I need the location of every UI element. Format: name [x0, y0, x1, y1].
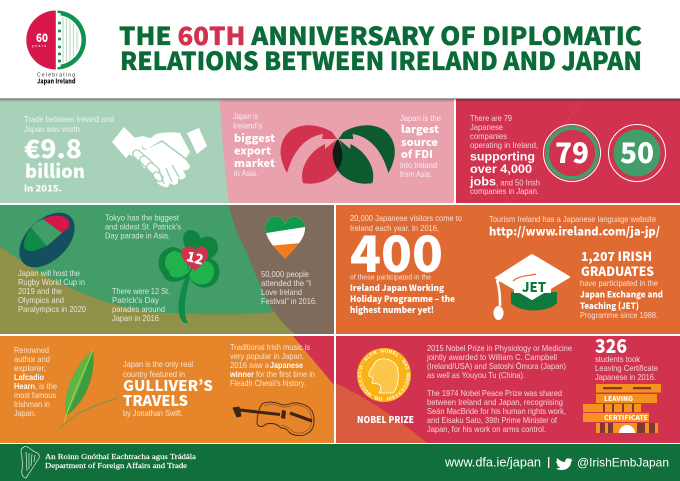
panel: rugby, St. Patrick's Day and festival: 2019 and the	[18, 287, 62, 296]
logo: 60 years Celebrating Japan Ireland	[26, 10, 86, 86]
icon: shamrock with 12: 12	[184, 246, 206, 270]
panel: biggest export market and largest source of FDI: Japan is	[233, 112, 258, 121]
panel: Lafcadio Hearn, Gulliver's Travels and Irish music: Japanese	[270, 361, 303, 370]
logo: 60 years Celebrating Japan Ireland: years	[32, 44, 46, 48]
panel: rugby, St. Patrick's Day and festival: Japan in 2016.	[112, 314, 161, 323]
panel: rugby, St. Patrick's Day and festival: Paralympics in 2020	[18, 305, 86, 314]
panel: Lafcadio Hearn, Gulliver's Travels and Irish music: Hearn	[14, 382, 35, 391]
panel: Japanese companies and jobs: jobs	[469, 176, 496, 188]
panel: trade worth 9.8 billion: €9.8	[24, 130, 82, 166]
panel: biggest export market and largest source of FDI: source	[401, 135, 438, 150]
icon: Irish flag heart	[266, 216, 305, 259]
footer bar: @IrishEmbJapan	[577, 456, 669, 470]
medal portrait	[369, 359, 398, 393]
panel: visitors and JET graduates: highest number yet!	[350, 303, 434, 316]
panel: Japanese companies and jobs: Japanese	[470, 123, 503, 132]
icon: shamrock with 12	[159, 230, 219, 323]
panel: Nobel Prize: NOBEL PRIZE	[357, 413, 414, 426]
panel: Japanese companies and jobs: over 4,000	[470, 164, 532, 176]
panel: rugby, St. Patrick's Day and festival: parades around	[112, 305, 165, 314]
panel: rugby, St. Patrick's Day and festival: Tokyo has the biggest	[105, 214, 180, 222]
icon: red and green arrows	[281, 125, 395, 184]
text: Nobel Prize details: 2015 Nobel Prize in Physiology or Medicine	[427, 344, 572, 353]
panel: biggest export market and largest source of FDI: in Asia.	[234, 169, 258, 178]
panel: Lafcadio Hearn, Gulliver's Travels and Irish music: most famous	[14, 391, 56, 400]
panel: biggest export market and largest source of FDI: biggest	[234, 131, 275, 146]
panel: Leaving Certificate: 326	[595, 332, 627, 359]
panel: biggest export market and largest source of FDI: largest	[401, 122, 439, 137]
title	[119, 17, 642, 78]
panel: Leaving Certificate: Leaving Certificate	[595, 364, 658, 373]
badge: 50	[608, 124, 666, 182]
logo: 60 years Celebrating Japan Ireland: 60	[36, 30, 48, 46]
panel: visitors and JET graduates: http://www.ireland.com/ja-jp/	[489, 224, 661, 240]
icon: quill leaf	[60, 350, 118, 429]
panel: biggest export market and largest source of FDI: market	[234, 156, 275, 171]
panel: trade worth 9.8 billion: Japan was worth	[24, 125, 80, 134]
panel: Leaving Certificate: students took	[595, 355, 641, 364]
panel: visitors and JET graduates: Programme since 1988.	[580, 311, 658, 320]
footer bar: Department of Foreign Affairs and Trade	[45, 461, 188, 470]
panel: Japanese companies and jobs: companies	[470, 132, 507, 141]
panel: rugby, St. Patrick's Day and festival: Patrick's Day	[112, 296, 160, 305]
panel: visitors and JET graduates: Tourism Ireland has a Japanese language website	[489, 215, 656, 224]
panel: Lafcadio Hearn, Gulliver's Travels and Irish music: Irishman in	[14, 400, 50, 409]
footer bar	[0, 444, 680, 481]
icon: stack of books: LEAVING	[604, 394, 633, 403]
title: RELATIONS BETWEEN IRELAND AND JAPAN	[120, 42, 642, 78]
icon: JET graduation cap	[494, 255, 569, 320]
icon: harp	[21, 447, 39, 478]
panel: Lafcadio Hearn, Gulliver's Travels and Irish music: country featured in	[123, 370, 185, 379]
panel: Lafcadio Hearn, Gulliver's Travels and Irish music: author and	[14, 355, 50, 364]
panel: Lafcadio Hearn, Gulliver's Travels and Irish music: explorer,	[14, 364, 46, 373]
panel: Lafcadio Hearn, Gulliver's Travels and Irish music: by Jonathan Swift.	[123, 409, 183, 418]
panel: Lafcadio Hearn, Gulliver's Travels and Irish music: for the first time in	[256, 370, 315, 379]
panel: visitors and JET graduates: have participated in the	[580, 279, 658, 288]
panel: Japanese companies and jobs: companies in Japan.	[470, 187, 539, 196]
panel: rugby, St. Patrick's Day and festival: Japan will host the	[18, 269, 80, 278]
icon: fiddle	[233, 402, 314, 436]
panel: trade worth 9.8 billion	[24, 115, 207, 194]
panel: visitors and JET graduates: Japan Exchange and	[580, 288, 663, 300]
panel: Japanese companies and jobs	[469, 114, 666, 196]
icon: handshake	[112, 127, 207, 187]
text: Nobel Prize details: jointly awarded to William C. Campbell	[426, 353, 557, 362]
panel: rugby, St. Patrick's Day and festival: attended the “I	[261, 279, 311, 288]
panel: Leaving Certificate: Japanese in 2016.	[595, 373, 656, 382]
icon: stack of books	[583, 384, 661, 433]
panel: visitors and JET graduates: 400	[350, 215, 443, 287]
icon: rugby ball	[9, 202, 85, 278]
panel: Lafcadio Hearn, Gulliver's Travels and Irish music: , is the	[35, 382, 57, 391]
panel: trade worth 9.8 billion: in 2015.	[24, 182, 62, 194]
panel: Lafcadio Hearn, Gulliver's Travels and Irish music: GULLIVER’S	[123, 375, 213, 396]
footer bar: www.dfa.ie/japan	[444, 454, 541, 470]
panel: biggest export market and largest source of FDI: Ireland's	[233, 122, 262, 130]
panel: Lafcadio Hearn, Gulliver's Travels and Irish music: Lafcadio	[14, 373, 44, 382]
panel: rugby, St. Patrick's Day and festival: Rugby World Cup in	[18, 278, 85, 287]
panel: visitors and JET graduates: GRADUATES	[581, 261, 654, 280]
panel: biggest export market and largest source of FDI: into Ireland	[400, 161, 437, 170]
badge: 50: 50	[620, 132, 654, 172]
panel: visitors and JET graduates: of these participated in the	[350, 272, 431, 282]
panel: Lafcadio Hearn, Gulliver's Travels and Irish music: 2016 saw a	[230, 361, 269, 370]
text: Nobel Prize details: Seán MacBride for his human rights work,	[427, 407, 566, 416]
panel: Lafcadio Hearn, Gulliver's Travels and Irish music	[14, 343, 315, 436]
panel: visitors and JET graduates: 20,000 Japanese visitors come to	[350, 214, 462, 223]
panel: Lafcadio Hearn, Gulliver's Travels and Irish music: Traditional Irish music is	[230, 343, 310, 352]
footer bar: An Roinn Gnóthaí Eachtracha agus Trádála	[45, 452, 197, 461]
icon: JET graduation cap: JET	[522, 277, 546, 296]
panel: Lafcadio Hearn, Gulliver's Travels and Irish music: Japan.	[14, 409, 36, 418]
icon: twitter bird	[556, 458, 572, 470]
panel: visitors and JET graduates: Holiday Programme – the	[350, 292, 455, 305]
panel: biggest export market and largest source of FDI: Japan is the	[400, 114, 441, 123]
panel: visitors and JET graduates: Ireland each year. In 2016,	[350, 224, 439, 233]
badge: 79: 79	[555, 132, 589, 172]
panel: Japanese companies and jobs: , and 50 Irish	[496, 178, 540, 188]
text: Nobel Prize details	[426, 344, 572, 434]
panel: rugby, St. Patrick's Day and festival: Festival” in 2016.	[261, 297, 317, 306]
panel: visitors and JET graduates: Ireland Japan Working	[350, 281, 445, 294]
panel backgrounds	[0, 98, 680, 443]
panel: rugby, St. Patrick's Day and festival: Olympics and	[18, 296, 64, 305]
panel: rugby, St. Patrick's Day and festival: Day parade in Asia.	[105, 232, 170, 240]
panel: Lafcadio Hearn, Gulliver's Travels and Irish music: Japan is the only real	[123, 360, 193, 369]
logo: 60 years Celebrating Japan Ireland: Japan Ireland	[37, 76, 76, 86]
panel: Lafcadio Hearn, Gulliver's Travels and Irish music: winner	[229, 370, 255, 379]
panel: Leaving Certificate	[583, 332, 661, 433]
text: Nobel Prize details: The 1974 Nobel Peace Prize was shared	[427, 389, 562, 398]
panel: rugby, St. Patrick's Day and festival	[18, 212, 316, 323]
panel: trade worth 9.8 billion: Trade between Ireland and	[24, 115, 114, 124]
text: Nobel Prize details: as well as Youyou Tu (China).	[427, 371, 525, 380]
panel: Lafcadio Hearn, Gulliver's Travels and Irish music: Fleadh Cheoil's history.	[230, 379, 306, 388]
panel: biggest export market and largest source of FDI: from Asia.	[400, 170, 432, 179]
panel: Lafcadio Hearn, Gulliver's Travels and Irish music: Renowned	[14, 346, 49, 355]
badge: 79	[544, 124, 600, 182]
panel: visitors and JET graduates	[350, 214, 663, 320]
title: THE 60TH ANNIVERSARY OF DIPLOMATIC	[119, 17, 642, 53]
panel: rugby, St. Patrick's Day and festival: and oldest St. Patrick's	[105, 222, 181, 232]
panel: visitors and JET graduates: 1,207 IRISH	[581, 246, 652, 265]
panel: biggest export market and largest source of FDI: of FDI	[401, 147, 433, 162]
text: Nobel Prize details: (Ireland/USA) and Satoshi Ōmura (Japan)	[427, 361, 566, 371]
panel: rugby, St. Patrick's Day and festival: Love Ireland	[261, 288, 302, 297]
panel: visitors and JET graduates: Teaching (JET)	[580, 299, 639, 312]
icon: stack of books: CERTIFICATE	[604, 413, 648, 422]
panel: rugby, St. Patrick's Day and festival: 50,000 people	[261, 270, 309, 279]
logo: 60 years Celebrating Japan Ireland: Celebrating	[37, 72, 75, 78]
icon: Nobel medal: OB. MDCCCXCVI · ALFR. NOBEL · NAT. MDCCCXXXIII	[358, 349, 410, 401]
text: Nobel Prize details: and Eisaku Sato, 39th Prime Minister of	[427, 416, 558, 425]
panel: Japanese companies and jobs: supporting	[470, 152, 535, 164]
panel: biggest export market and largest source of FDI: export	[234, 144, 271, 158]
panel: Lafcadio Hearn, Gulliver's Travels and Irish music: TRAVELS	[123, 390, 188, 411]
text: Nobel Prize details: Japan, for his work on arms control.	[427, 425, 546, 434]
panel: Lafcadio Hearn, Gulliver's Travels and Irish music: very popular in Japan.	[230, 352, 304, 361]
panel: Japanese companies and jobs: There are 79	[470, 114, 512, 123]
panel: biggest export market and largest source of FDI	[233, 112, 441, 184]
panel: Nobel Prize	[357, 344, 572, 434]
panel: Japanese companies and jobs: operating in Ireland,	[470, 141, 538, 150]
panel: rugby, St. Patrick's Day and festival: There were 12 St.	[112, 287, 170, 296]
text: Nobel Prize details: between Ireland and Japan, recognising	[427, 398, 563, 407]
panel: trade worth 9.8 billion: billion	[25, 158, 85, 184]
